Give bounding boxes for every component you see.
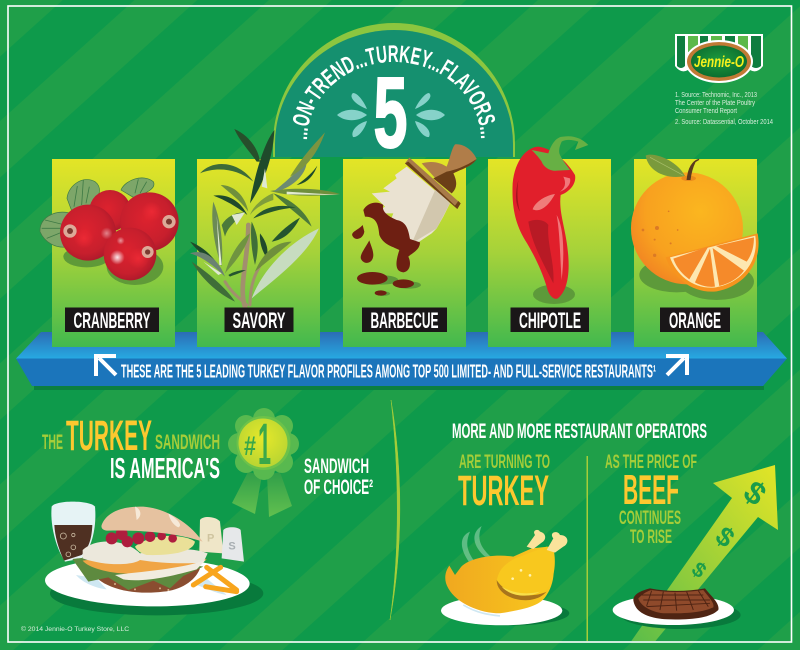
- icon: chipotle pepper: [512, 136, 588, 304]
- icon: sandwich plate: P: [207, 533, 214, 545]
- text: price of beef: CONTINUES: [619, 508, 681, 529]
- arch header: [273, 23, 515, 169]
- panel: savory: [190, 129, 340, 347]
- source notes: The Center of the Plate Poultry: [675, 100, 755, 107]
- arrow: rising price: [625, 465, 778, 650]
- text: price of beef: [605, 452, 697, 548]
- icon: steak on plate: [613, 588, 741, 629]
- label: [65, 308, 159, 332]
- text: turning to turkey: ARE TURNING TO: [459, 452, 550, 473]
- label: [510, 308, 589, 332]
- fries: [193, 567, 237, 592]
- sandwich: [77, 558, 200, 593]
- dollar signs: $: [737, 473, 773, 513]
- divider curve: [390, 400, 400, 620]
- icon: orange: [631, 155, 759, 300]
- panel: cranberry: CRANBERRY: [74, 308, 151, 333]
- text: price of beef: BEEF: [623, 466, 679, 513]
- panel: chipotle: [488, 136, 611, 347]
- icon: number one rosette: #: [244, 431, 256, 461]
- source notes: 2. Source: Datassential, October 2014: [675, 119, 773, 126]
- blue shelf banner: [16, 332, 787, 390]
- arrow: up right: [666, 356, 687, 375]
- label: [660, 308, 730, 332]
- splash icons: [337, 93, 445, 137]
- heading: turkey sandwich: [42, 412, 220, 485]
- column divider: [586, 456, 588, 641]
- panel: barbecue: [343, 144, 477, 347]
- dollar signs: $: [687, 558, 711, 583]
- panel: savory: SAVORY: [232, 308, 286, 333]
- shakers: [199, 517, 223, 553]
- dollar signs: [692, 482, 766, 578]
- heading: turkey sandwich: SANDWICH: [155, 431, 220, 454]
- text: turning to turkey: [458, 452, 550, 515]
- panel: orange: ORANGE: [669, 308, 721, 333]
- panel: cranberry: [40, 159, 179, 347]
- text: turning to turkey: TURKEY: [458, 467, 549, 515]
- heading: turkey sandwich: IS AMERICA'S: [110, 453, 220, 485]
- source notes: Consumer Trend Report: [675, 108, 737, 115]
- panel: orange: [631, 155, 759, 347]
- big number 5: 5: [374, 57, 408, 169]
- heading: turkey sandwich: TURKEY: [66, 412, 152, 460]
- label: [224, 308, 294, 332]
- arrow: up left: [96, 356, 116, 376]
- icon: sandwich plate: [45, 502, 263, 615]
- label: [362, 308, 447, 332]
- logo wordmark: Jennie-O: [694, 54, 744, 71]
- icon: number one rosette: 1: [258, 412, 271, 477]
- logo: [675, 34, 763, 83]
- arch title: ...ON-TREND...TURKEY...FLAVORS...: [293, 45, 496, 140]
- panel: barbecue: BARBECUE: [370, 308, 438, 333]
- text: sandwich of choice: OF CHOICE²: [304, 476, 373, 499]
- icon: roast turkey on plate: [441, 526, 569, 626]
- icon: number one rosette: [228, 408, 299, 517]
- heading: turkey sandwich: THE: [42, 431, 63, 454]
- source notes: [675, 92, 773, 126]
- text: price of beef: AS THE PRICE OF: [605, 452, 697, 473]
- source notes: 1. Source: Technomic, Inc., 2013: [675, 92, 757, 99]
- plate: [45, 556, 250, 608]
- icon: sandwich plate: S: [228, 540, 236, 552]
- dollar signs: $: [710, 521, 740, 553]
- text: sandwich of choice: SANDWICH: [304, 455, 369, 478]
- text: price of beef: TO RISE: [630, 527, 672, 548]
- copyright: © 2014 Jennie-O Turkey Store, LLC: [21, 625, 129, 633]
- icon: savory herb: [190, 129, 340, 307]
- icon: cranberries: [40, 178, 179, 285]
- text: sandwich of choice: [304, 455, 373, 499]
- glass: [51, 502, 95, 562]
- panel: chipotle: CHIPOTLE: [519, 308, 581, 333]
- icon: barbecue brush: [352, 144, 477, 296]
